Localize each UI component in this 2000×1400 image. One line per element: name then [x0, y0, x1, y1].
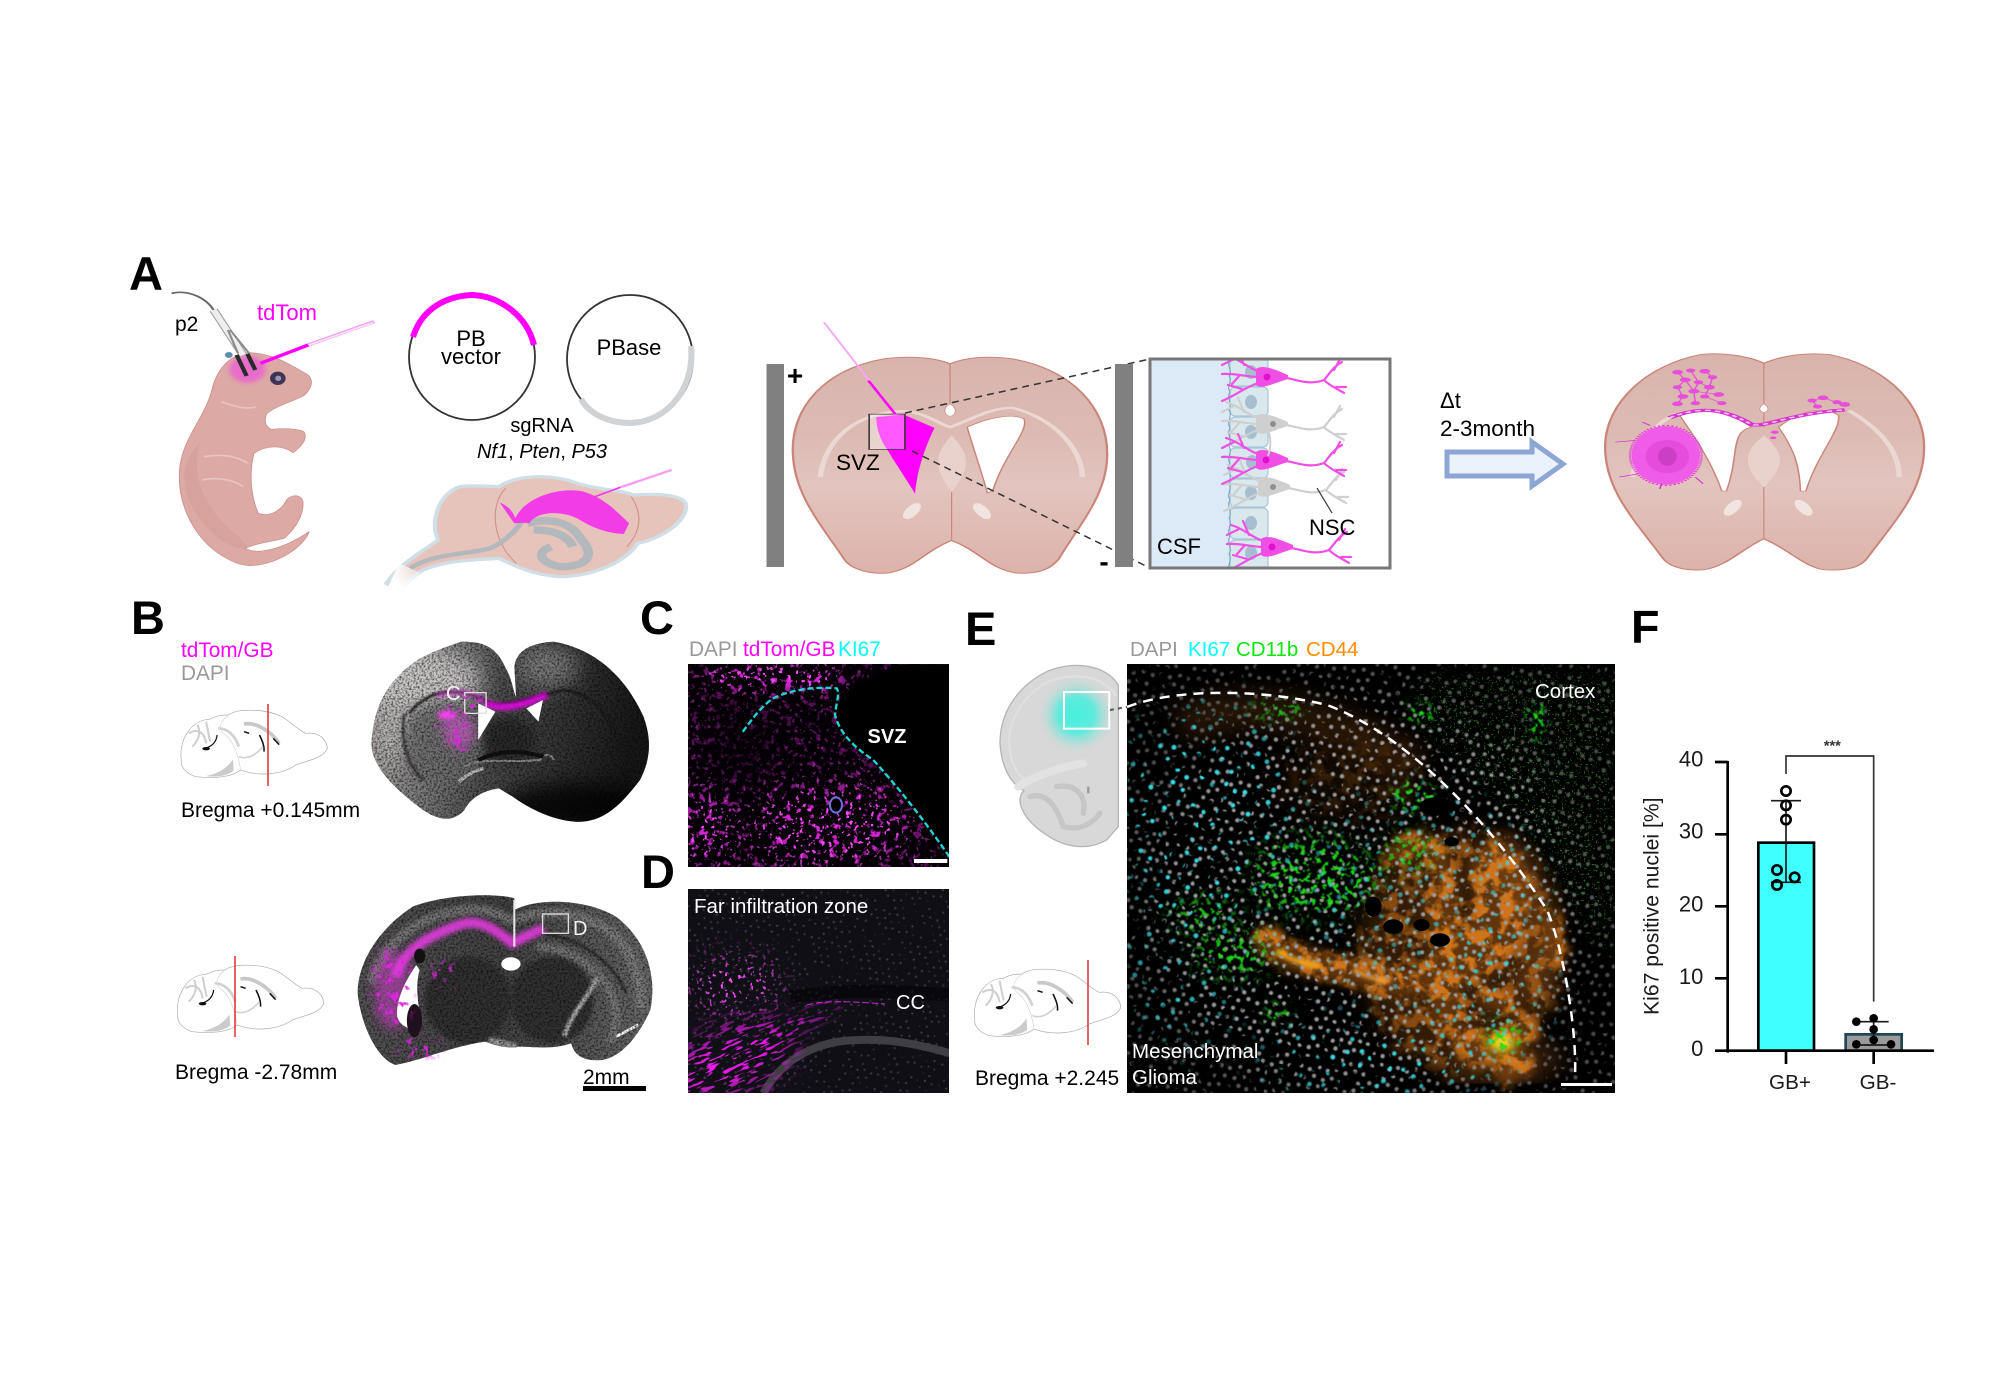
panel E: tumour overview	[965, 602, 1615, 1093]
y-axis title: Ki67 positive nuclei [%]	[1640, 797, 1663, 1015]
panel C: SVZ micrograph	[640, 591, 949, 867]
sagittal locator lower	[177, 956, 324, 1037]
text: minus sign: -	[1099, 546, 1109, 577]
icon: sagittal brain with injection	[384, 470, 686, 597]
micrograph C	[688, 664, 949, 867]
x tick labels: GB-	[1860, 1071, 1896, 1094]
text: p2: p2	[175, 313, 198, 336]
legend: tdTom/GB, DAPI	[181, 639, 273, 685]
text: sgRNA targets: sgRNA	[510, 415, 574, 437]
plasmid: PBase	[567, 295, 693, 423]
panel F: bar chart Ki67	[1631, 601, 1934, 1094]
legend: DAPI KI67 CD11b CD44: DAPI	[1130, 638, 1178, 661]
sagittal locator upper	[181, 704, 327, 786]
scale bar E	[1561, 1083, 1612, 1086]
text: time interval: 2-3month	[1440, 416, 1535, 441]
data points GB+	[1772, 786, 1799, 890]
y tick labels: 20	[1679, 891, 1703, 916]
text: NSC: NSC	[1309, 515, 1356, 540]
y tick labels: 40	[1679, 746, 1703, 771]
sagittal locator E	[974, 960, 1121, 1045]
text: tdTom: tdTom	[257, 300, 317, 325]
legend: DAPI KI67 CD11b CD44	[1130, 638, 1358, 661]
text: Cortex: Cortex	[1535, 680, 1596, 703]
label F: F	[1631, 601, 1659, 653]
label D marker: D	[573, 918, 587, 940]
label C: C	[640, 591, 674, 644]
text: time interval	[1440, 388, 1535, 441]
legend: DAPI KI67 CD11b CD44: CD44	[1306, 638, 1358, 661]
text: Bregma +2.245: Bregma +2.245	[975, 1067, 1119, 1090]
scale bar: 2mm: 2mm	[583, 1066, 630, 1089]
inset: ventricular zone with neural stem cells	[1150, 350, 1390, 572]
zoom dashed lines	[905, 359, 1150, 568]
tumour border dashed	[1127, 693, 1575, 1075]
text: CSF: CSF	[1157, 534, 1201, 559]
plasmid: PBase: PBase	[597, 335, 661, 360]
plasmid: PB vector: PB	[456, 326, 486, 351]
significance bracket	[1786, 756, 1874, 1002]
text: Mesenchymal Glioma	[1133, 1043, 1258, 1084]
scale bar: 2mm	[583, 1066, 646, 1091]
significance stars: ***	[1824, 739, 1841, 755]
label B: B	[131, 591, 165, 644]
text: plus sign: +	[787, 360, 803, 391]
plasmid: PB vector: vector	[441, 344, 501, 369]
y tick labels: 0	[1691, 1036, 1703, 1061]
plasmid: PB vector	[409, 294, 535, 420]
y tick labels: 30	[1679, 819, 1703, 844]
panel B: whole-brain sections	[131, 591, 661, 1091]
error bar GB-	[1859, 1022, 1889, 1045]
y tick labels: 10	[1679, 964, 1703, 989]
bar: GB+	[1758, 843, 1814, 1051]
data points GB-	[1852, 1014, 1895, 1049]
NSC pointer line	[1317, 488, 1332, 513]
micrograph D: Far infiltration zone	[694, 895, 868, 918]
micrograph D: CC	[896, 992, 925, 1014]
text: SVZ: SVZ	[836, 450, 880, 475]
text: sgRNA targets: Nf1, Pten, P53	[477, 441, 607, 463]
legend: DAPI tdTom/GB KI67	[689, 638, 881, 661]
arrow	[1447, 442, 1563, 486]
x tick labels: GB+	[1769, 1071, 1811, 1094]
label C marker: C	[446, 683, 460, 705]
legend: DAPI tdTom/GB KI67: KI67	[838, 638, 881, 661]
error bar GB+	[1771, 801, 1801, 882]
label A: A	[129, 247, 163, 300]
text: sgRNA targets	[477, 415, 607, 463]
legend: DAPI KI67 CD11b CD44: KI67	[1188, 638, 1230, 661]
icon: mouse pup with electroporation	[172, 292, 374, 566]
text: Bregma +0.145mm: Bregma +0.145mm	[181, 799, 360, 822]
legend: DAPI KI67 CD11b CD44: CD11b	[1236, 638, 1298, 661]
bar: GB-	[1846, 1034, 1902, 1051]
y tick labels	[1679, 746, 1703, 1061]
grey electrode bar: minus	[1115, 364, 1133, 567]
x-axis with ticks	[1715, 1051, 1934, 1064]
label D: D	[641, 845, 675, 898]
text: Mesenchymal Glioma: Mesenchymal	[1132, 1040, 1258, 1063]
panel D: far infiltration micrograph	[644, 856, 949, 1093]
coronal brain with tumour and infiltration	[1605, 354, 1924, 570]
coronal brain with SVZ injection	[793, 322, 1107, 573]
text: Bregma -2.78mm: Bregma -2.78mm	[175, 1061, 337, 1084]
x tick labels	[1769, 1071, 1896, 1094]
dashed connector to schematic	[1110, 707, 1127, 710]
legend: tdTom/GB, DAPI: tdTom/GB	[181, 639, 273, 662]
panel A: experimental schematic	[129, 247, 1924, 597]
label E: E	[965, 602, 996, 655]
micrograph E	[1127, 664, 1615, 1093]
icon: hemisphere schematic with tumour location	[1000, 665, 1118, 847]
micrograph D	[688, 889, 949, 1093]
micrograph C: SVZ	[868, 726, 906, 748]
text: Mesenchymal Glioma: Glioma	[1132, 1066, 1198, 1089]
legend: DAPI tdTom/GB KI67: DAPI	[689, 638, 738, 661]
micrograph: upper section	[371, 642, 649, 822]
micrograph: lower section	[358, 895, 652, 1065]
text: time interval: Δt	[1440, 388, 1461, 413]
legend: tdTom/GB, DAPI: DAPI	[181, 662, 230, 685]
grey electrode bar: plus	[766, 364, 784, 567]
legend: DAPI tdTom/GB KI67: tdTom/GB	[743, 638, 835, 661]
y-axis with ticks	[1715, 761, 1728, 1053]
